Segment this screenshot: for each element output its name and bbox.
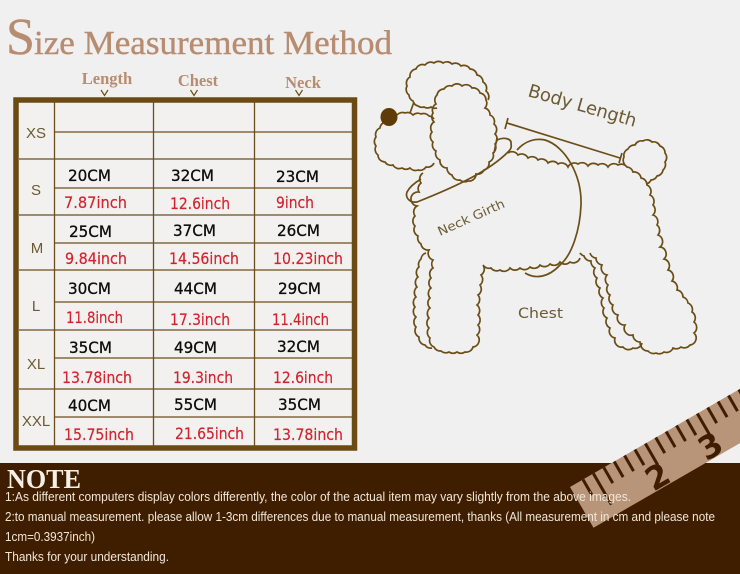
measuring tape: 2 [639, 455, 677, 499]
row M values: 26CM [277, 221, 320, 240]
far front leg [413, 253, 432, 348]
row M values: 37CM [173, 221, 216, 240]
size labels: XXL [22, 413, 50, 430]
row XL values [62, 337, 333, 387]
note text [5, 489, 715, 564]
row XXL values [64, 395, 343, 444]
title [6, 9, 392, 66]
row S values: 23CM [276, 167, 319, 186]
row M values: 10.23inch [273, 249, 343, 268]
row XXL values: 55CM [174, 395, 217, 414]
note heading: NOTE [7, 464, 81, 494]
row XXL values: 35CM [278, 395, 321, 414]
size labels: M [31, 240, 43, 257]
row XXL values: 21.65inch [175, 424, 244, 443]
size labels [22, 125, 50, 430]
measuring tape: 3 [691, 424, 730, 468]
row S values [64, 166, 319, 213]
row S values: 7.87inch [64, 193, 127, 212]
row M values: 14.56inch [169, 249, 239, 268]
label: neck girth: Neck Girth [435, 196, 507, 239]
size labels: XS [26, 125, 46, 142]
row S values: 12.6inch [170, 194, 230, 213]
row M values [65, 221, 343, 268]
row M values: 9.84inch [65, 249, 127, 268]
chest girth loop [517, 139, 581, 277]
row XL values: 32CM [277, 337, 320, 356]
row L values: 30CM [68, 279, 111, 298]
row XXL values: 40CM [68, 396, 111, 415]
note text: 1cm=0.3937inch) [5, 529, 95, 544]
column headers: Neck [285, 73, 322, 92]
row L values: 44CM [174, 279, 217, 298]
dog illustration [374, 61, 697, 354]
column headers: Length [82, 69, 132, 88]
body length bar [505, 118, 622, 163]
row XL values: 19.3inch [173, 368, 233, 387]
row XXL values: 13.78inch [273, 425, 343, 444]
row XL values: 13.78inch [62, 368, 132, 387]
size labels: L [32, 298, 40, 315]
row M values: 25CM [69, 222, 112, 241]
tail puff [623, 140, 667, 184]
column headers: Chest [178, 71, 219, 90]
row S values: 9inch [276, 193, 314, 212]
measuring tape [570, 382, 740, 534]
row S values: 32CM [171, 166, 214, 185]
title: S [6, 9, 35, 66]
note text: 1:As different computers display colors differently, the color of the actual item may vary slightly from the above images. [5, 489, 631, 504]
row L values: 29CM [278, 279, 321, 298]
nose [380, 108, 398, 126]
body outline [411, 152, 697, 354]
size table [16, 100, 354, 448]
far hind leg [580, 253, 642, 350]
row XL values: 12.6inch [273, 368, 333, 387]
size labels: S [31, 182, 41, 199]
row L values [66, 279, 329, 329]
muzzle [374, 102, 434, 171]
row XL values: 35CM [69, 338, 112, 357]
size labels: XL [27, 356, 45, 373]
label: body length: Body Length [526, 81, 639, 132]
row L values: 11.4inch [272, 310, 329, 329]
row XL values: 49CM [174, 338, 217, 357]
title: ize Measurement Method [34, 25, 392, 62]
column headers [82, 69, 322, 96]
row L values: 11.8inch [66, 308, 123, 327]
row S values: 20CM [68, 166, 111, 185]
neck girth loop [407, 138, 511, 202]
ear [430, 84, 497, 182]
head puff [406, 61, 489, 108]
note text: Thanks for your understanding. [5, 549, 169, 564]
row L values: 17.3inch [170, 310, 230, 329]
row XXL values: 15.75inch [64, 425, 134, 444]
label: chest: Chest [518, 306, 563, 322]
note band [0, 463, 740, 574]
